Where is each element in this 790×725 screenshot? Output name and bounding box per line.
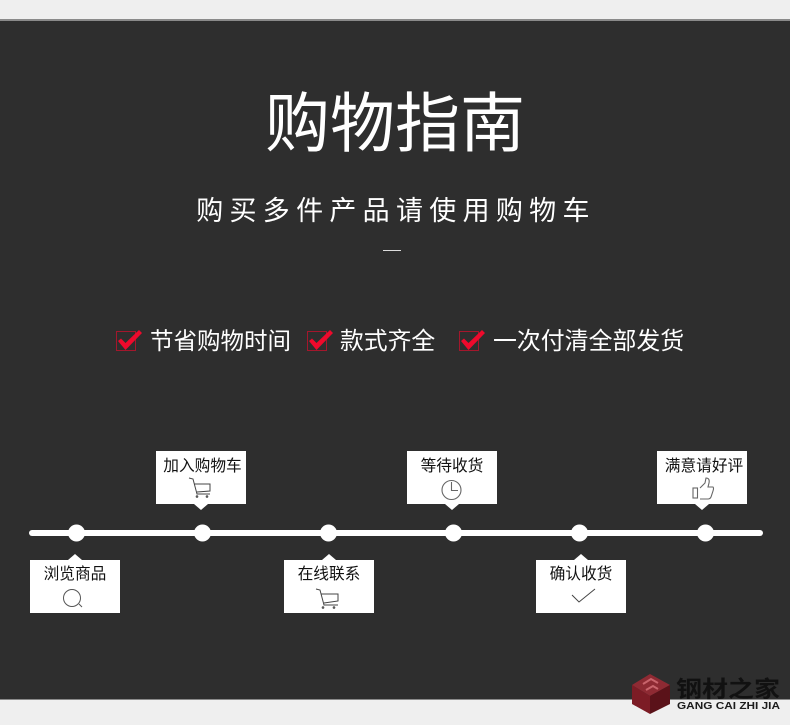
step: browse: 浏览商品 bbox=[44, 565, 106, 583]
title: 购物指南 bbox=[265, 87, 525, 160]
step: wait for delivery: 等待收货 bbox=[421, 457, 483, 475]
step: confirm receipt bbox=[536, 554, 626, 613]
step: positive review: 满意请好评 bbox=[665, 456, 744, 475]
step: wait for delivery bbox=[407, 451, 497, 510]
step: contact bbox=[284, 554, 374, 613]
icon: thumbs up bbox=[693, 478, 714, 499]
step: add to cart: 加入购物车 bbox=[163, 457, 242, 475]
benefit: save time: 节省购物时间 bbox=[150, 328, 291, 354]
step: positive review bbox=[657, 451, 747, 510]
icon: red check bbox=[116, 330, 142, 350]
step: contact: 在线联系 bbox=[298, 565, 360, 583]
icon: red check bbox=[308, 330, 333, 350]
step: confirm receipt: 确认收货 bbox=[550, 565, 612, 583]
logo: watermark: GANG CAI ZHI JIA bbox=[677, 701, 780, 712]
benefit: ship together: 一次付清全部发货 bbox=[493, 328, 684, 355]
icon: cart bbox=[316, 589, 338, 608]
icon: cart bbox=[189, 478, 210, 497]
step: browse bbox=[30, 554, 120, 613]
icon: clock bbox=[442, 480, 461, 500]
icon: check mark bbox=[572, 589, 595, 602]
icon: magnifier bbox=[64, 590, 82, 607]
benefit: styles: 款式齐全 bbox=[340, 328, 435, 355]
timeline bbox=[29, 524, 763, 542]
step: add to cart bbox=[156, 451, 246, 510]
icon: red cube bbox=[632, 674, 670, 714]
logo: watermark: 钢材之家 bbox=[676, 676, 781, 702]
logo: watermark bbox=[632, 674, 781, 714]
icon: red check bbox=[460, 330, 485, 350]
subtitle: 购买多件产品请使用购物车 bbox=[196, 196, 596, 226]
